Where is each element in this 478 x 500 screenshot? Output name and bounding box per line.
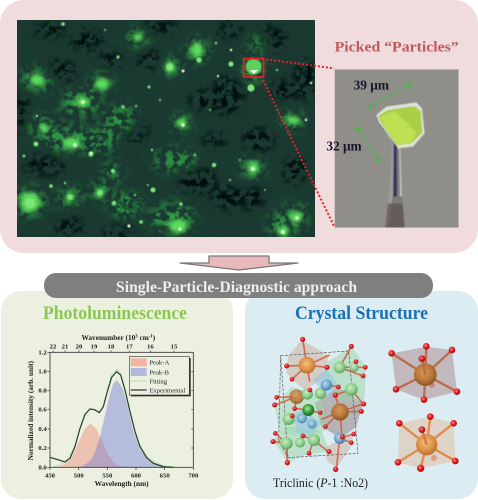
legend [129,357,191,396]
axis titles [26,333,156,488]
coordination octahedron: dark [388,343,460,403]
axis titles: Normalized intensity (arb. unit) [26,360,35,460]
fitting curve [53,369,177,467]
panel: crystal structure [245,291,478,499]
y axis labels: 0.8 [38,388,47,395]
y axis labels: 0.4 [38,426,47,433]
top axis labels: 20 [76,343,83,350]
panel: photoluminescence [1,291,233,499]
top axis labels: 21 [62,343,68,350]
top axis labels: 17 [126,343,133,350]
x axis labels: 450 [45,472,56,479]
legend: Experimental [149,388,185,395]
axis titles: ) [153,333,156,342]
heading: photoluminescence: Photoluminescence [43,304,187,324]
measurement: 32 micrometres [326,124,382,164]
caption: triclinic space group: Triclinic (P-1 :No2) [273,476,368,490]
top axis labels: 16 [147,343,154,350]
photo: green luminescent particle field [14,20,316,239]
y axis labels [38,349,47,471]
banner: single-particle-diagnostic approach: Single-Particle-Diagnostic approach [116,279,357,296]
legend: Fitting [149,379,168,386]
x axis labels [45,472,199,479]
x axis labels: 500 [74,472,84,479]
experimental curve [50,372,173,467]
coordination octahedron: light [395,413,459,472]
legend: Peak-A [149,360,169,367]
top axis labels: 18 [108,343,115,350]
x axis labels: 600 [131,472,142,479]
axis titles: Wavelength (nm) [95,479,149,488]
x axis labels: 650 [160,472,170,479]
legend: Peak-B [149,369,169,376]
axis titles: cm [138,333,149,342]
crystal [376,102,425,148]
chart: fitted photoluminescence spectrum [26,333,199,488]
y axis labels: 0.0 [38,464,47,471]
panel: picked particles [0,0,478,253]
y axis labels: 0.2 [38,445,47,452]
peak A area [58,424,129,467]
arrow: down to approach [180,256,298,270]
heading: crystal structure: Crystal Structure [295,304,428,324]
top axis labels: 15 [171,343,178,350]
peak B area [78,380,173,467]
mottled clump texture [17,20,315,237]
oxygen atoms [270,337,368,472]
x axis labels: 700 [188,472,199,479]
picked particle marker with dotted zoom lines [244,40,459,228]
top axis labels [50,343,178,350]
top axis labels: 22 [50,343,57,350]
measurement: 32 micrometres: 32 μm [326,139,362,154]
y axis labels: 1.0 [38,368,47,375]
axis titles: 3 [135,335,138,340]
photo: particle on a needle tip [326,69,459,228]
x axis labels: 550 [102,472,113,479]
metal atoms [289,389,304,404]
bonds [273,339,365,469]
crystal unit cell [270,337,368,472]
measurement: 39 micrometres [354,77,413,111]
measurement: 39 micrometres: 39 μm [354,77,389,92]
axis titles: Wavenumber (10 [81,333,135,342]
top axis labels: 19 [91,343,98,350]
needle [390,144,402,204]
y axis labels: 0.6 [38,407,47,414]
banner: single-particle-diagnostic approach [44,273,433,298]
heading: picked particles: Picked “Particles” [335,40,459,56]
axes [50,352,193,467]
axis titles: -1 [149,335,153,340]
y axis labels: 1.2 [38,349,47,356]
